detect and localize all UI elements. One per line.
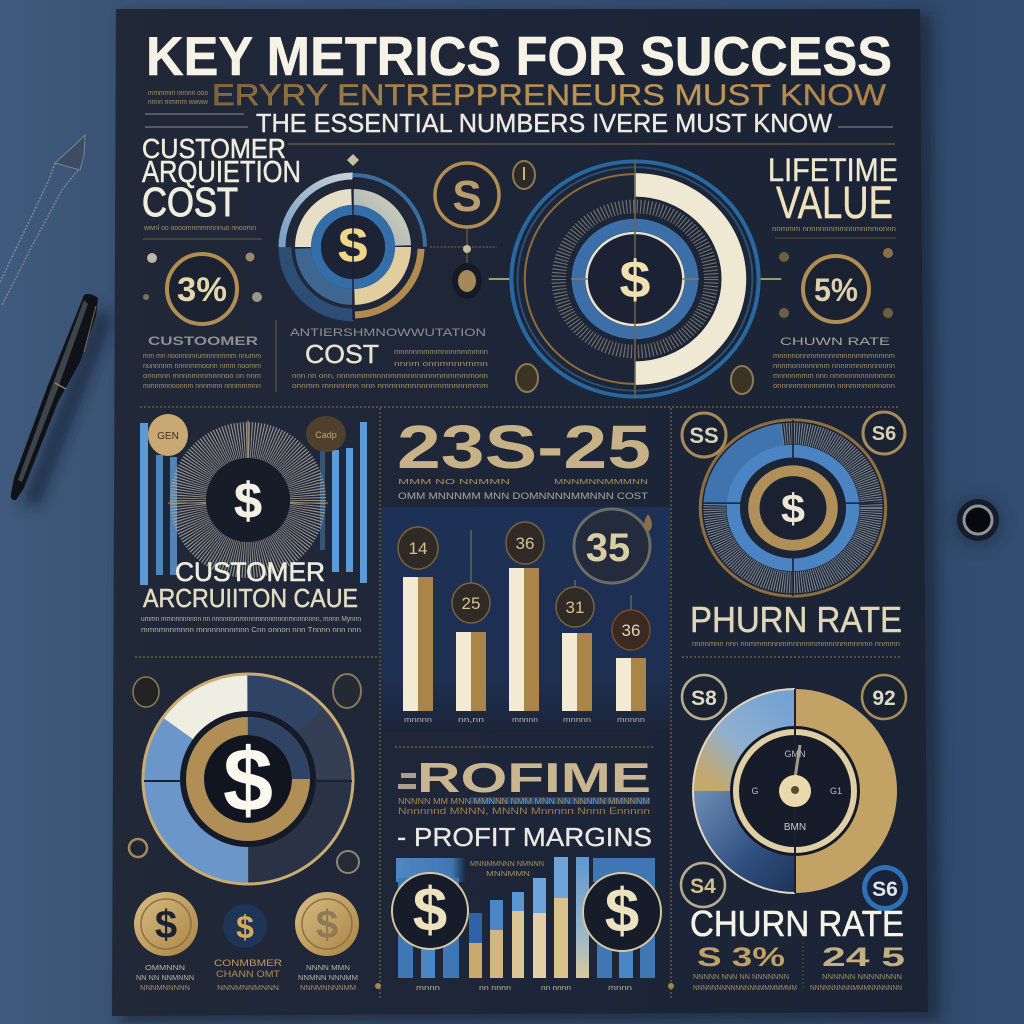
badge: 5% bbox=[779, 248, 893, 322]
panel heading: CUSTOMER bbox=[175, 557, 325, 587]
gauge bbox=[693, 689, 897, 893]
bar labels: nn,nn bbox=[458, 717, 484, 724]
badge: 3% bbox=[143, 252, 262, 324]
chart: large target ring bbox=[489, 159, 781, 399]
corner badge top right: 92 bbox=[872, 687, 896, 710]
heading: customer acquisition cost: CUSTOMER bbox=[142, 133, 286, 164]
heading: CHURN RATE bbox=[690, 903, 904, 944]
caption in chart bbox=[470, 861, 544, 878]
chart labels: nn nnnn bbox=[479, 985, 511, 992]
subtitle: gold: nnnn mmmm wwww bbox=[148, 99, 209, 106]
panel: customer acquisition value bbox=[140, 414, 367, 634]
text block: cost: nnnm onnmnnnmmn bbox=[394, 361, 488, 368]
circular chart bbox=[700, 420, 886, 596]
panel: churn rate gauge bbox=[681, 675, 908, 992]
navy center panel backdrop bbox=[381, 507, 670, 732]
corner badge right bbox=[863, 412, 905, 454]
pie chart bbox=[129, 660, 367, 898]
chart: medium ring: S bbox=[338, 219, 368, 271]
gauge: GMN bbox=[784, 749, 806, 759]
text block: customer: nunnnnm nnnnmmoonn nmm noomm bbox=[143, 363, 261, 370]
heading: customer acquisition cost: COST bbox=[142, 179, 238, 225]
bar chart bbox=[396, 857, 655, 978]
corner badge left bbox=[682, 413, 726, 457]
panel: churn rate ring bbox=[682, 412, 905, 648]
corner badge right: S6 bbox=[872, 423, 896, 445]
gold caption band: NNNNN MM MNN MMNNN NMM MNN NN NNNNN MMNNNM bbox=[398, 797, 650, 806]
panel bottom dots bbox=[375, 983, 674, 989]
coin: gold left: $ bbox=[155, 903, 177, 947]
icon: round metal ring on desk bbox=[953, 497, 1003, 547]
subtitle: gold: mmmmm nnnnn ooo bbox=[148, 90, 208, 97]
coin: gold left bbox=[134, 892, 198, 956]
coin captions bbox=[136, 958, 358, 992]
title: KEY METRICS FOR SUCCESS bbox=[146, 25, 892, 87]
dollar medallion left: $ bbox=[413, 876, 447, 945]
stat: right: 24 5 bbox=[822, 942, 905, 972]
number caption: MNNMNNMMMNN bbox=[554, 479, 648, 486]
small badge right bbox=[337, 851, 359, 873]
gold medal left bbox=[148, 414, 188, 456]
text block: customer: mm mn noonnnnnumnnnnnmm nnumm bbox=[143, 353, 261, 360]
coin captions: CONMBMER bbox=[214, 958, 283, 968]
chart: large target ring: $ bbox=[620, 250, 650, 309]
coin captions: NNMNN NNNMM bbox=[298, 975, 358, 982]
chart labels: mnnn bbox=[416, 985, 440, 992]
coin: navy middle: $ bbox=[236, 909, 254, 945]
bar labels: mnnnn bbox=[617, 717, 645, 724]
coin captions: NN NN NNMNNN bbox=[136, 975, 194, 982]
text block: churn rate: mnnnnonnmmnnnnmnnnmmmnnmm bbox=[773, 353, 895, 360]
text block: churn rate: CHUWN RATE bbox=[780, 336, 890, 348]
small badge top left bbox=[133, 677, 159, 707]
poster shadow bbox=[120, 14, 940, 1024]
chart: medium ring bbox=[281, 154, 497, 320]
coin captions: CHANN OMT bbox=[216, 969, 281, 979]
coin captions: NNNMNNNNMM bbox=[300, 985, 356, 992]
text block: cost: mnnnnmmmmnnnmmmmnn bbox=[394, 349, 488, 356]
poster board bbox=[112, 9, 928, 1016]
gauge: G bbox=[751, 786, 759, 796]
text block: churn rate: mnnnnmmm nnn nmmnnmnnnmmmn bbox=[773, 373, 895, 380]
bar labels: mnnnn bbox=[512, 717, 538, 724]
panel: profit margins bbox=[392, 754, 661, 992]
large value circle: 35 bbox=[586, 526, 630, 570]
number caption bbox=[398, 479, 649, 501]
number caption: OMM MNNNMM MNN DOMNNNNMMNNN COST bbox=[398, 491, 649, 501]
pie chart: $ bbox=[223, 731, 273, 831]
panel text: mmnmnnmnnn mnnnnnnnmnn Cnn onnon nnn Tnnnn nnn nnn bbox=[141, 627, 361, 634]
stat captions: NNNNNN NNNNNNNN bbox=[822, 974, 902, 981]
icon: bronze pendant bbox=[452, 263, 482, 299]
text block: cost: COST bbox=[305, 339, 379, 369]
coin: gold right bbox=[295, 892, 359, 956]
caption in chart: MNNMMN bbox=[486, 871, 530, 878]
large value circle bbox=[574, 509, 652, 583]
number caption: MMM NO NNMMN bbox=[398, 479, 510, 486]
caption: nnnnmnn nnn nnmmmnnnmmnnnnmmmnnnmmnnmn nnmmn bbox=[692, 641, 900, 648]
gold caption band bbox=[398, 797, 650, 816]
gauge: G1 bbox=[830, 786, 842, 796]
dollar medallion right bbox=[583, 873, 661, 951]
chart labels: nn nnnn bbox=[541, 985, 571, 992]
text block: churn rate bbox=[773, 336, 895, 390]
text block: customer: onnmnn mnnnmnnmnnnoo on nnm bbox=[143, 373, 261, 380]
coin: gold right: $ bbox=[316, 903, 338, 947]
coin: navy middle bbox=[223, 904, 267, 948]
heading: lifetime value: nnmmm nnnnnnnmmnnmnmmonnn bbox=[772, 226, 896, 233]
bar labels bbox=[404, 717, 645, 724]
text block: customer: CUSTOOMER bbox=[148, 334, 258, 348]
corner badge bottom right bbox=[862, 865, 908, 911]
bronze medal right: Cadp bbox=[315, 430, 337, 440]
text block: customer bbox=[143, 334, 261, 390]
stat captions bbox=[693, 942, 902, 992]
bars bbox=[403, 568, 646, 711]
corner badge left: SS bbox=[689, 423, 719, 448]
chart labels bbox=[416, 985, 632, 992]
text block: cost: onnmm mnnnnmn nnn nmmnnmnnnnnmmnnnnmmm bbox=[292, 383, 488, 390]
icon: small bronze dial bbox=[513, 161, 535, 189]
bar value medals: 14 bbox=[409, 539, 427, 558]
heading: PHURN RATE bbox=[690, 599, 902, 640]
bar value medals bbox=[398, 522, 650, 650]
text block: cost: nnn nn onn, nnnmmmmnnnmmnnnnnnnmmmmmmonn bbox=[292, 373, 488, 380]
heading: profime: ROFIME bbox=[417, 754, 651, 801]
corner badge bottom left bbox=[681, 863, 725, 907]
caption in chart: MNNMMNNN NMNNN bbox=[470, 861, 544, 868]
heading: customer acquisition cost: ARQUIETION bbox=[142, 154, 301, 189]
panel heading bbox=[143, 557, 358, 613]
heading: profime bbox=[398, 754, 651, 801]
bar labels: mnnnn bbox=[563, 717, 591, 724]
panel: big number and bar chart bbox=[397, 413, 652, 724]
gauge: BMN bbox=[784, 822, 806, 833]
bar value medals: 36 bbox=[516, 534, 534, 553]
circular chart: $ bbox=[781, 486, 805, 531]
subtitle: white: THE ESSENTIAL NUMBERS IVERE MUST KNOW bbox=[256, 108, 832, 138]
bar value medals: 31 bbox=[566, 598, 584, 617]
dollar medallion right: $ bbox=[605, 877, 639, 946]
coin captions: OMMNNN bbox=[145, 965, 185, 972]
chart labels: mnnn bbox=[608, 985, 632, 992]
corner badge top right bbox=[862, 675, 906, 719]
small badge left bbox=[129, 839, 147, 857]
icon: gold dollar ring: S bbox=[452, 172, 482, 221]
stat: left: S 3% bbox=[697, 942, 785, 972]
blue columns bbox=[140, 422, 367, 585]
coin captions: NNNN MMN bbox=[306, 965, 350, 972]
corner badge bottom left: S4 bbox=[690, 875, 716, 898]
pen shadow bbox=[22, 305, 112, 505]
badge: 5%: 5% bbox=[814, 272, 858, 308]
corner badge top left: S8 bbox=[691, 687, 717, 710]
panel text bbox=[141, 616, 361, 634]
small dials under large ring bbox=[516, 364, 753, 394]
stat captions: NNNNN NNN NN NNNNNNN bbox=[693, 974, 789, 981]
heading: customer acquisition cost bbox=[142, 133, 301, 239]
heading: lifetime value bbox=[768, 152, 898, 238]
corner badge bottom right: S6 bbox=[872, 878, 898, 901]
small badge top right bbox=[333, 674, 361, 708]
heading: customer acquisition cost: wwnl oo oooomnmmnnnnuo nnoomn bbox=[143, 225, 256, 232]
subtitle: gold: ERYRY ENTREPPRENEURS MUST KNOW bbox=[212, 79, 887, 112]
gold medal left: GEN bbox=[157, 431, 179, 442]
sunburst bbox=[168, 420, 328, 560]
vertical rule bbox=[275, 320, 277, 392]
bar value medals: 25 bbox=[462, 594, 480, 613]
dollar medallion left bbox=[392, 873, 468, 949]
section dividers bbox=[135, 407, 900, 1000]
bar labels: mnnnn bbox=[404, 717, 432, 724]
coin captions: NNNMNNMNNN bbox=[217, 985, 279, 992]
coin captions: NNNMNNNNN bbox=[140, 985, 190, 992]
stat captions: NNNNNNNNNNNNNNMMMMMMM bbox=[693, 985, 797, 992]
badge: 3%: 3% bbox=[177, 271, 227, 309]
panel heading: ARCRUIITON CAUE bbox=[143, 583, 358, 613]
heading: lifetime value: VALUE bbox=[776, 177, 893, 228]
icon: gold dollar ring bbox=[435, 163, 499, 227]
bar value medals: 36 bbox=[622, 621, 640, 640]
panel text: ummn mmnnnnnnnn nn nnnnnnmmnnnmnnnmnnnmnnnnnnn, mnnn Mynnn bbox=[141, 616, 361, 623]
text block: churn rate: onnnnmnnnmmnn nnnmmmnnnonn bbox=[773, 383, 895, 390]
text block: cost: ANTIERSHMNOWWUTATION bbox=[290, 327, 486, 339]
corner badge top left bbox=[682, 675, 726, 719]
text block: customer: mmnmnnoonnm nnnmmn nnnmmmnn bbox=[143, 383, 261, 390]
heading: lifetime value: LIFETIME bbox=[768, 152, 898, 188]
icon: pen bbox=[11, 294, 98, 500]
icon: hanging earring on desk bbox=[0, 135, 85, 305]
text block: churn rate: nnnmonnnnnmm nnnmmnmnnnnmn bbox=[773, 363, 895, 370]
big number: 23S-25 bbox=[397, 413, 651, 481]
bronze medal right bbox=[306, 416, 346, 452]
text block: cost bbox=[290, 327, 488, 390]
divider line under subtitle bbox=[288, 143, 895, 145]
gold caption band: Nnnnnnd MNNN, MNNN Mnnnnn Nnnn Ennnnn bbox=[398, 806, 650, 816]
heading: profit margins: - PROFIT MARGINS bbox=[397, 822, 652, 852]
sunburst: $ bbox=[234, 473, 262, 529]
stat captions: NNNNNNNNNMMMNNNNNNN bbox=[810, 985, 902, 992]
panel: customer value pie bbox=[129, 660, 367, 992]
